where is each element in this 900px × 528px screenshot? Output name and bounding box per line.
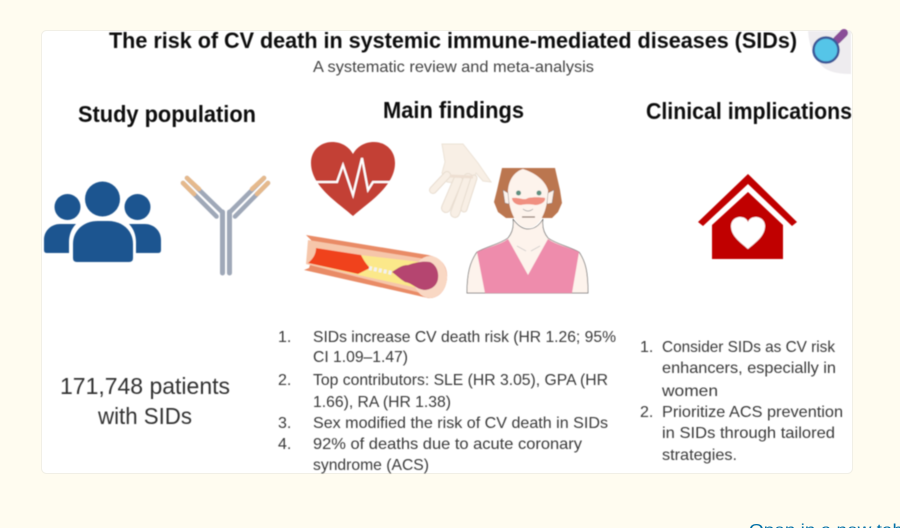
icon: antibody — [183, 178, 268, 273]
list: main findings: Top contributors: SLE (HR 3.05), GPA (HR — [313, 372, 608, 389]
list: main findings: 2. — [278, 372, 291, 389]
title: The risk of CV death in systemic immune-mediated diseases (SIDs) — [109, 28, 797, 53]
heading: study population: Study population — [78, 101, 256, 127]
list: clinical implications: Consider SIDs as CV risk — [662, 339, 836, 356]
list: clinical implications: Prioritize ACS prevention — [662, 404, 843, 421]
list: clinical implications: strategies. — [662, 447, 737, 464]
list: clinical implications — [640, 339, 843, 464]
text: patient count: 171,748 patients — [60, 373, 230, 399]
icon: house with heart — [698, 174, 797, 259]
list: main findings: 1.66), RA (HR 1.38) — [313, 394, 451, 411]
list: main findings: 92% of deaths due to acute coronary — [313, 436, 582, 453]
list: main findings: CI 1.09–1.47) — [313, 349, 408, 366]
icon: hand — [433, 144, 491, 213]
heading: main findings: Main findings — [383, 97, 524, 123]
list: main findings: syndrome (ACS) — [313, 457, 429, 474]
heart cutout — [731, 217, 765, 249]
list: main findings — [278, 329, 616, 474]
list: clinical implications: enhancers, especially in — [662, 360, 836, 377]
list: main findings: SIDs increase CV death risk (HR 1.26; 95% — [313, 329, 616, 346]
heading: clinical implications: Clinical implications — [646, 98, 852, 124]
list: main findings: 4. — [278, 436, 291, 453]
list: clinical implications: 2. — [640, 404, 653, 421]
list: main findings: Sex modified the risk of CV death in SIDs — [313, 415, 608, 432]
list: main findings: 1. — [278, 329, 291, 346]
icon: magnifying glass badge — [808, 31, 851, 74]
panel: abstract content — [44, 28, 852, 474]
icon: group of people — [44, 182, 161, 262]
subtitle: A systematic review and meta-analysis — [313, 59, 594, 76]
icon: woman with butterfly rash — [467, 168, 588, 293]
text: patient count — [60, 373, 230, 429]
list: clinical implications: women — [661, 383, 718, 400]
list: main findings: 3. — [278, 415, 291, 432]
icon: heart with ECG — [311, 142, 395, 216]
icon: artery with plaque — [304, 235, 447, 298]
list: clinical implications: 1. — [640, 339, 653, 356]
list: clinical implications: in SIDs through tailored — [662, 425, 835, 442]
panel: abstract card — [42, 30, 852, 474]
text: patient count: with SIDs — [97, 403, 192, 429]
